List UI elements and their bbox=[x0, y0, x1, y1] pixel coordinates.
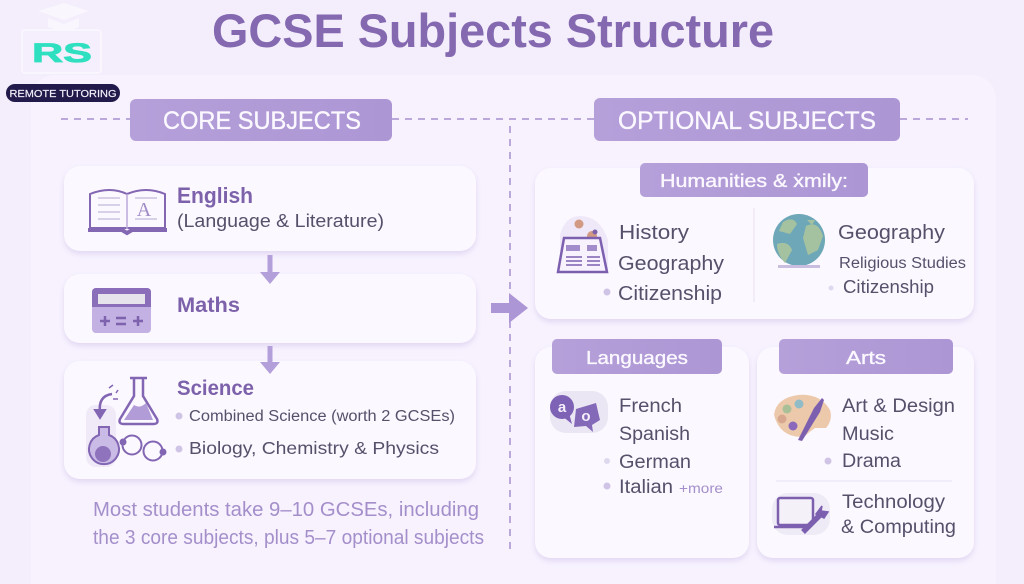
heading: Humanities: Humanities & ẋmily: bbox=[660, 171, 848, 191]
heading: Humanities bbox=[640, 163, 868, 197]
icon: calculator bbox=[92, 288, 151, 333]
icon: speech bubbles: o bbox=[581, 408, 591, 425]
panel: Humanities: Citizenship bbox=[618, 283, 722, 305]
panel: Humanities: Geography bbox=[618, 253, 724, 275]
icon: open book bbox=[88, 190, 167, 233]
heading: optional subjects bbox=[594, 98, 900, 141]
heading: Languages bbox=[552, 339, 722, 374]
panel: Humanities bbox=[535, 163, 974, 319]
icon: history book and people bbox=[558, 216, 608, 272]
panel: Arts bbox=[757, 339, 974, 558]
panel: Languages: German bbox=[619, 452, 691, 473]
bullet list: Combined Science (worth 2 GCSEs) bbox=[189, 408, 455, 425]
icon: paint palette bbox=[774, 395, 831, 441]
panel: Arts: Art & Design bbox=[842, 396, 955, 417]
heading: Arts: Arts bbox=[846, 348, 886, 368]
bullet list: Biology, Chemistry & Physics bbox=[189, 438, 439, 458]
panel: Languages: Spanish bbox=[619, 424, 690, 445]
icon: graduation cap bbox=[38, 3, 89, 33]
icon: open book: A bbox=[137, 199, 152, 221]
panel: Languages: Italian bbox=[619, 477, 673, 498]
dashed header lines bbox=[61, 118, 968, 120]
panel: Arts: Music bbox=[842, 424, 894, 445]
panel: Humanities: History bbox=[619, 222, 689, 244]
panel: Science bbox=[64, 361, 476, 479]
panel: English bbox=[64, 166, 476, 251]
arrow: core to optional bbox=[491, 293, 528, 323]
panel: Languages bbox=[535, 339, 749, 558]
heading: core subjects: CORE SUBJECTS bbox=[163, 107, 361, 135]
panel: Humanities: Geography bbox=[838, 222, 945, 244]
icon: laptop and wrench bbox=[772, 493, 830, 535]
note text: the 3 core subjects, plus 5–7 optional subjects bbox=[93, 527, 484, 549]
logo: RS Remote Tutoring: RS bbox=[32, 38, 92, 68]
arrow: English to Maths bbox=[260, 255, 280, 284]
icon: speech bubbles bbox=[550, 391, 608, 433]
heading: Languages: Languages bbox=[586, 348, 688, 368]
panel: Humanities: Religious Studies bbox=[839, 255, 966, 272]
panel: Arts: & Computing bbox=[841, 517, 956, 538]
panel: Languages: French bbox=[619, 396, 682, 417]
panel: Arts: Drama bbox=[842, 451, 901, 472]
title: GCSE Subjects Structure bbox=[212, 4, 774, 57]
panel: Arts: Technology bbox=[842, 492, 946, 513]
note text bbox=[93, 499, 484, 549]
panel: Maths bbox=[64, 274, 476, 343]
heading: optional subjects: OPTIONAL SUBJECTS bbox=[618, 107, 876, 135]
panel: Maths: Maths bbox=[177, 294, 240, 317]
icon: science flasks bbox=[86, 378, 166, 467]
icon: globe bbox=[773, 214, 825, 268]
icon: speech bubbles: a bbox=[558, 399, 567, 416]
arrow: Maths to Science bbox=[260, 346, 280, 374]
panel: Humanities: Citizenship bbox=[843, 277, 934, 297]
heading: Arts bbox=[779, 339, 953, 374]
logo: RS Remote Tutoring bbox=[6, 3, 120, 102]
panel: English: (Language & Literature) bbox=[177, 210, 384, 231]
heading: core subjects bbox=[130, 99, 392, 141]
note text: Most students take 9–10 GCSEs, including bbox=[93, 499, 479, 521]
panel: English: English bbox=[177, 183, 253, 208]
bullet list bbox=[176, 408, 455, 458]
logo: RS Remote Tutoring: REMOTE TUTORING bbox=[10, 88, 116, 100]
panel: Science: Science bbox=[177, 377, 254, 400]
panel: Languages: +more bbox=[679, 481, 723, 496]
